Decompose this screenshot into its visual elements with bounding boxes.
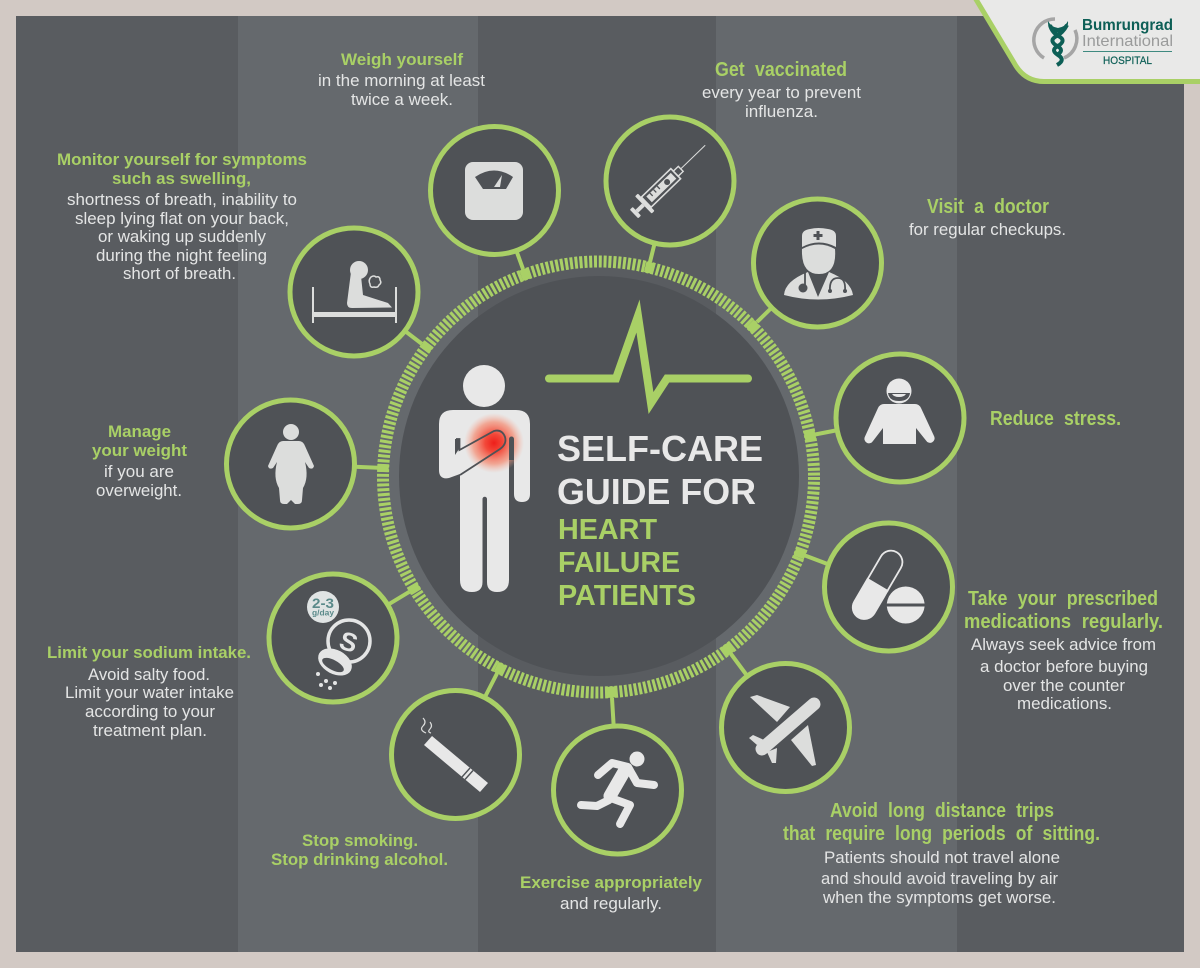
text: medications: a doctor before buying — [980, 657, 1148, 676]
logo panel: International — [1082, 33, 1173, 50]
text: sodium intake: Limit your water intake — [65, 683, 234, 702]
circle: salt shaker: g/day — [312, 608, 334, 618]
circle: overweight person — [226, 400, 354, 528]
title: FAILURE — [558, 547, 680, 579]
text: exercise — [520, 874, 703, 913]
text: manage weight: overweight. — [96, 481, 182, 500]
title: PATIENTS — [558, 580, 696, 612]
icon: ECG pulse line — [549, 316, 748, 403]
text: sodium intake: treatment plan. — [93, 721, 207, 740]
circle: bed and breathless person — [290, 228, 418, 356]
text: get vaccinated: influenza. — [745, 102, 818, 121]
circle: doctor — [754, 199, 882, 327]
circle: pills — [824, 523, 952, 651]
text: reduce stress: Reduce stress. — [990, 408, 1121, 430]
text: avoid long trips — [783, 800, 1100, 907]
text: stop smoking: Stop drinking alcohol. — [271, 851, 448, 869]
text: manage weight: if you are — [104, 462, 174, 481]
circle: salt shaker: S — [336, 625, 362, 659]
title: HEART — [558, 514, 657, 546]
text: monitor symptoms: such as swelling, — [112, 170, 251, 188]
text: avoid long trips: and should avoid traveling by air — [821, 869, 1058, 888]
text: medications: Take your prescribed — [968, 588, 1158, 610]
circle: smiling person — [836, 354, 964, 482]
circle: syringe — [606, 117, 734, 245]
circle: salt shaker: 2-3 — [312, 595, 334, 611]
text: medications: Always seek advice from — [971, 635, 1156, 654]
text: weigh yourself: twice a week. — [351, 90, 453, 109]
text: visit a doctor: Visit a doctor — [927, 196, 1049, 218]
text: avoid long trips: that require long periods of sitting. — [783, 823, 1100, 845]
text: sodium intake: Avoid salty food. — [88, 665, 210, 684]
text: sodium intake — [47, 644, 251, 740]
text: medications: medications. — [1017, 694, 1112, 713]
circle: cigarette — [392, 690, 520, 818]
text: monitor symptoms — [57, 151, 307, 283]
text: medications: medications regularly. — [964, 611, 1163, 633]
text: avoid long trips: Avoid long distance trips — [830, 800, 1054, 822]
text: monitor symptoms: short of breath. — [123, 264, 236, 283]
text: monitor symptoms: shortness of breath, inability to — [67, 190, 297, 209]
text: medications — [964, 588, 1163, 713]
circle: airplane — [722, 664, 850, 792]
circle: weigh scale — [430, 126, 558, 254]
text: monitor symptoms: Monitor yourself for symptoms — [57, 151, 307, 169]
text: stop smoking: Stop smoking. — [302, 832, 418, 850]
text: visit a doctor — [909, 196, 1066, 239]
text: exercise: and regularly. — [560, 894, 662, 913]
text: stop smoking — [271, 832, 448, 869]
text: sodium intake: according to your — [85, 702, 215, 721]
text: avoid long trips: when the symptoms get worse. — [822, 888, 1056, 907]
text: sodium intake: Limit your sodium intake. — [47, 644, 251, 662]
text: monitor symptoms: during the night feeling — [96, 246, 267, 265]
icon: caduceus emblem — [1034, 19, 1077, 65]
text: exercise: Exercise appropriately — [520, 874, 703, 892]
circle: salt shaker — [269, 574, 397, 702]
text: weigh yourself — [318, 51, 485, 109]
text: monitor symptoms: sleep lying flat on your back, — [75, 209, 289, 228]
text: medications: over the counter — [1003, 676, 1125, 695]
text: monitor symptoms: or waking up suddenly — [98, 227, 266, 246]
text: manage weight — [92, 423, 188, 500]
logo panel — [974, 0, 1200, 82]
text: get vaccinated: every year to prevent — [702, 83, 861, 102]
text: weigh yourself: in the morning at least — [318, 71, 485, 90]
text: get vaccinated — [702, 59, 861, 121]
text: weigh yourself: Weigh yourself — [341, 51, 464, 69]
text: get vaccinated: Get vaccinated — [715, 59, 847, 81]
title — [557, 428, 763, 612]
circle: runner — [554, 726, 682, 854]
logo panel: HOSPITAL — [1103, 55, 1152, 67]
logo panel: Bumrungrad — [1082, 17, 1173, 34]
text: manage weight: your weight — [92, 442, 188, 460]
icon: human figure with chest pain — [439, 365, 530, 592]
title: GUIDE FOR — [557, 471, 756, 512]
central dial with tick ring and connectors — [290, 181, 900, 790]
text: avoid long trips: Patients should not travel alone — [824, 848, 1060, 867]
title: SELF-CARE — [557, 428, 763, 469]
text: visit a doctor: for regular checkups. — [909, 220, 1066, 239]
text: manage weight: Manage — [108, 423, 171, 441]
